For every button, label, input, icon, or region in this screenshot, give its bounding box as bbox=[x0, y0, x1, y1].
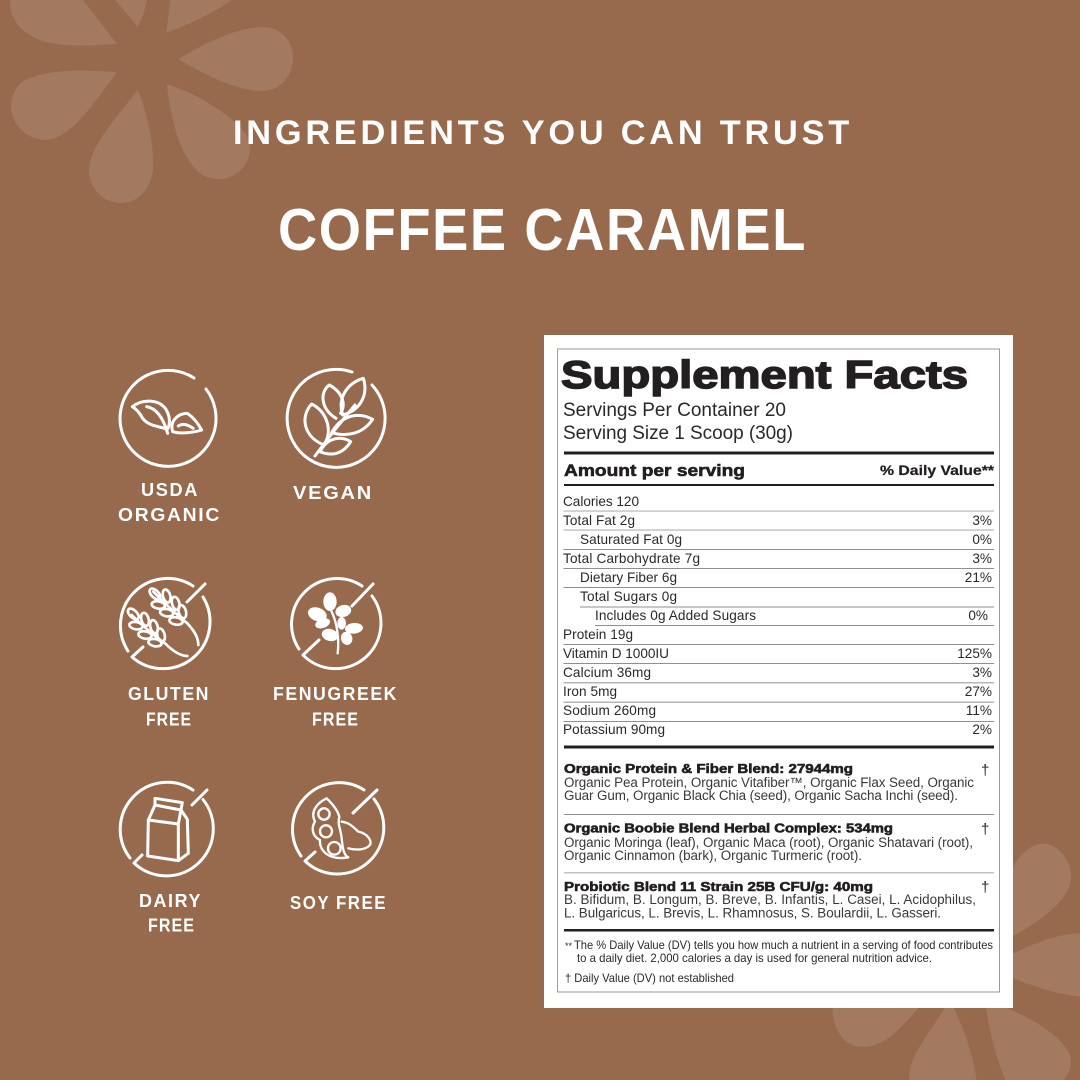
nutrient rows: Total Fat 2g bbox=[563, 513, 635, 528]
label: gluten free: GLUTEN bbox=[128, 683, 210, 704]
icon: soybeans crossed out bbox=[293, 783, 384, 874]
blend: organic protein and fiber: Organic Pea Protein, Organic Vitafiber™, Organic Flax Seed, Organic bbox=[564, 775, 974, 790]
label: dairy free: FREE bbox=[148, 915, 195, 936]
panel: supplement facts card bbox=[544, 335, 1013, 1008]
icon: wheat crossed out bbox=[120, 578, 210, 669]
table header bbox=[564, 461, 995, 480]
nutrient rows bbox=[563, 494, 994, 737]
nutrient rows: 21% bbox=[965, 570, 992, 585]
nutrient rows: Potassium 90mg bbox=[563, 722, 665, 737]
nutrient rows: Total Carbohydrate 7g bbox=[563, 551, 700, 566]
nutrient rows: Sodium 260mg bbox=[563, 703, 656, 718]
nutrient rows: Saturated Fat 0g bbox=[580, 532, 682, 547]
footnotes bbox=[565, 939, 993, 985]
badge: USDA organic bbox=[118, 370, 221, 525]
blend: organic boobie herbal complex: Organic Cinnamon (bark), Organic Turmeric (root). bbox=[564, 848, 862, 863]
blend: organic boobie herbal complex: † bbox=[981, 821, 989, 838]
nutrient rows: Calories 120 bbox=[563, 494, 639, 509]
nutrient rows: Includes 0g Added Sugars bbox=[595, 608, 756, 623]
label: gluten free bbox=[128, 683, 210, 730]
icon: leaves in circle bbox=[120, 370, 216, 466]
nutrient rows: 0% bbox=[972, 532, 992, 547]
icon: plant sprig in circle bbox=[287, 369, 385, 467]
nutrient rows: 3% bbox=[972, 513, 992, 528]
footnotes: The % Daily Value (DV) tells you how much a nutrient in a serving of food contributes bbox=[574, 939, 993, 952]
nutrient rows: Dietary Fiber 6g bbox=[580, 570, 677, 585]
nutrient rows: 0% bbox=[968, 608, 988, 623]
blend: probiotic: Probiotic Blend 11 Strain 25B CFU/g: 40mg bbox=[564, 879, 873, 894]
heading: coffee caramel: COFFEE CARAMEL bbox=[278, 196, 807, 263]
nutrient rows: 3% bbox=[972, 551, 992, 566]
badge: soy free bbox=[290, 783, 387, 913]
table header: Amount per serving bbox=[564, 461, 745, 480]
label: fenugreek free bbox=[273, 683, 398, 730]
nutrient rows: Iron 5mg bbox=[563, 684, 617, 699]
blend: organic protein and fiber: Guar Gum, Organic Black Chia (seed), Organic Sacha Inchi (seed). bbox=[564, 788, 958, 803]
nutrient rows: 11% bbox=[966, 703, 992, 718]
footnotes: † Daily Value (DV) not established bbox=[565, 972, 734, 985]
badge: fenugreek free bbox=[273, 579, 398, 730]
supplement facts title: Supplement Facts bbox=[561, 354, 968, 397]
nutrient rows: 125% bbox=[957, 646, 992, 661]
nutrient rows: 3% bbox=[972, 665, 992, 680]
label: vegan: VEGAN bbox=[293, 482, 373, 503]
decorative flower: top left bbox=[10, 0, 293, 203]
servings info: Serving Size 1 Scoop (30g) bbox=[563, 423, 793, 444]
icon: fenugreek crossed out bbox=[292, 579, 381, 669]
blend: organic boobie herbal complex: Organic Boobie Blend Herbal Complex: 534mg bbox=[564, 820, 893, 836]
label: USDA organic: ORGANIC bbox=[118, 504, 221, 525]
blend: probiotic: B. Bifidum, B. Longum, B. Breve, B. Infantis, L. Casei, L. Acidophilus, bbox=[564, 892, 976, 907]
label: fenugreek free: FENUGREEK bbox=[273, 683, 398, 704]
decorative flower: bottom right bbox=[833, 844, 1080, 1080]
nutrient rows: Vitamin D 1000IU bbox=[563, 646, 669, 661]
nutrient rows: 2% bbox=[972, 722, 992, 737]
blend: organic protein and fiber bbox=[564, 761, 989, 803]
nutrient rows: Total Sugars 0g bbox=[580, 589, 677, 604]
label: fenugreek free: FREE bbox=[312, 709, 359, 730]
blend: organic boobie herbal complex bbox=[564, 820, 989, 863]
badge: dairy free bbox=[120, 782, 213, 936]
blend: organic protein and fiber: Organic Protein & Fiber Blend: 27944mg bbox=[564, 761, 853, 776]
label: gluten free: FREE bbox=[146, 709, 192, 730]
nutrient rows: Protein 19g bbox=[563, 627, 633, 642]
table header: % Daily Value** bbox=[880, 463, 995, 478]
icon: milk carton crossed out bbox=[120, 782, 213, 876]
blend: probiotic: † bbox=[981, 879, 989, 896]
nutrient rows: 27% bbox=[965, 684, 992, 699]
label: dairy free bbox=[139, 890, 202, 936]
footnotes: ** bbox=[565, 941, 573, 951]
blend: probiotic: L. Bulgaricus, L. Brevis, L. Rhamnosus, S. Boulardii, L. Gasseri. bbox=[564, 906, 941, 920]
heading: ingredients you can trust: INGREDIENTS YOU CAN TRUST bbox=[233, 114, 853, 152]
label: soy free: SOY FREE bbox=[290, 892, 387, 913]
badge: vegan bbox=[287, 369, 385, 503]
footnotes: to a daily diet. 2,000 calories a day is used for general nutrition advice. bbox=[577, 952, 932, 965]
servings info bbox=[563, 400, 793, 444]
badge: gluten free bbox=[120, 578, 210, 730]
blend: organic protein and fiber: † bbox=[981, 762, 989, 779]
servings info: Servings Per Container 20 bbox=[563, 400, 786, 421]
label: USDA organic: USDA bbox=[141, 479, 199, 500]
blend: probiotic bbox=[564, 879, 989, 920]
nutrient rows: Calcium 36mg bbox=[563, 665, 651, 680]
blend: organic boobie herbal complex: Organic Moringa (leaf), Organic Maca (root), Organic Shatavari (root), bbox=[564, 835, 973, 850]
label: dairy free: DAIRY bbox=[139, 890, 202, 911]
label: USDA organic bbox=[118, 479, 221, 525]
